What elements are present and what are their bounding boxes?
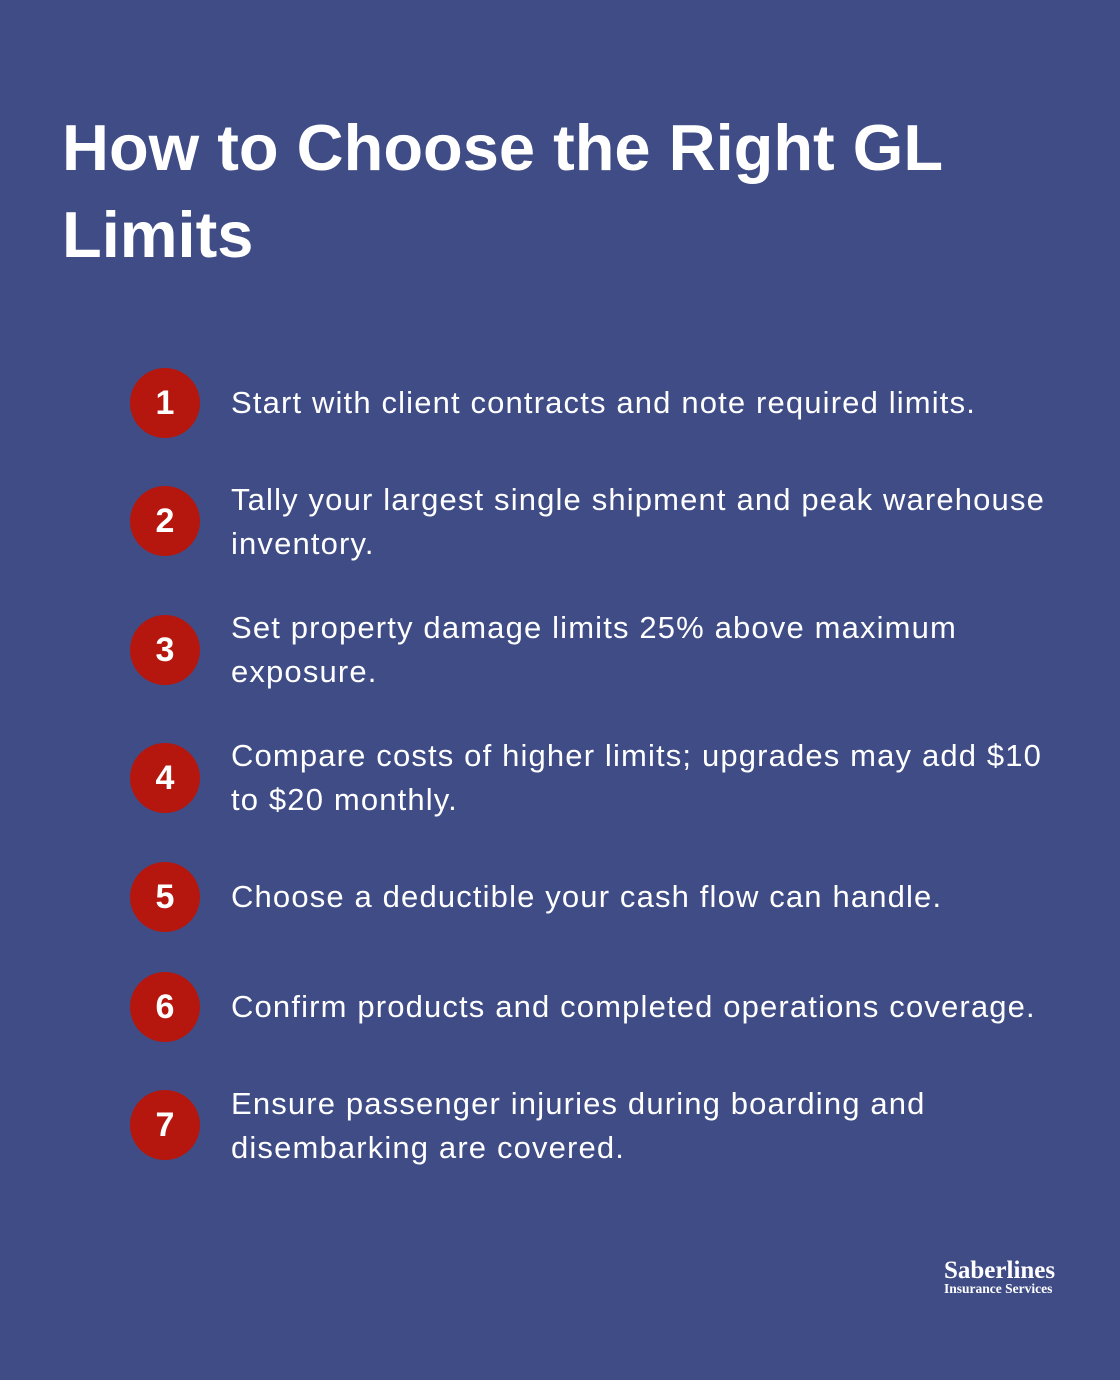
text 3 [231,610,957,689]
text 2 [231,482,1045,561]
icon: number 4: 4 [156,759,174,797]
text 2: inventory. [231,526,375,561]
icon: number 2: 2 [156,502,174,540]
step 5 [130,862,942,932]
text 7: Ensure passenger injuries during boarding and [231,1086,926,1121]
icon: number 1 [130,368,200,438]
icon: number 7 [130,1090,200,1160]
text 6: Confirm products and completed operations coverage. [231,989,1036,1024]
icon: number 5: 5 [156,878,174,916]
icon: number 2 [130,486,200,556]
title: How to Choose the Right GL [62,111,943,184]
icon: number 4 [130,743,200,813]
step 3 [130,610,957,689]
text 2: Tally your largest single shipment and peak warehouse [231,482,1045,517]
text 3: Set property damage limits 25% above maximum [231,610,957,645]
icon: number 7: 7 [156,1106,174,1144]
title [62,111,943,271]
text 7 [231,1086,926,1165]
title: Limits [62,198,253,271]
icon: number 6 [130,972,200,1042]
step 1 [130,368,976,438]
text 1: Start with client contracts and note required limits. [231,385,976,420]
icon: number 3: 3 [156,631,174,669]
step 4 [130,738,1042,817]
text 4: to $20 monthly. [231,782,458,817]
icon: number 1: 1 [156,384,174,422]
logo [944,1257,1055,1296]
text 4 [231,738,1042,817]
icon: number 6: 6 [156,988,174,1026]
logo: Insurance Services [944,1281,1052,1296]
text 5: Choose a deductible your cash flow can handle. [231,879,942,914]
step 2 [130,482,1045,561]
text 4: Compare costs of higher limits; upgrades may add $10 [231,738,1042,773]
icon: number 3 [130,615,200,685]
logo: Saberlines [944,1257,1055,1284]
step 6 [130,972,1036,1042]
text 3: exposure. [231,654,378,689]
step 7 [130,1086,926,1165]
text 7: disembarking are covered. [231,1130,625,1165]
icon: number 5 [130,862,200,932]
